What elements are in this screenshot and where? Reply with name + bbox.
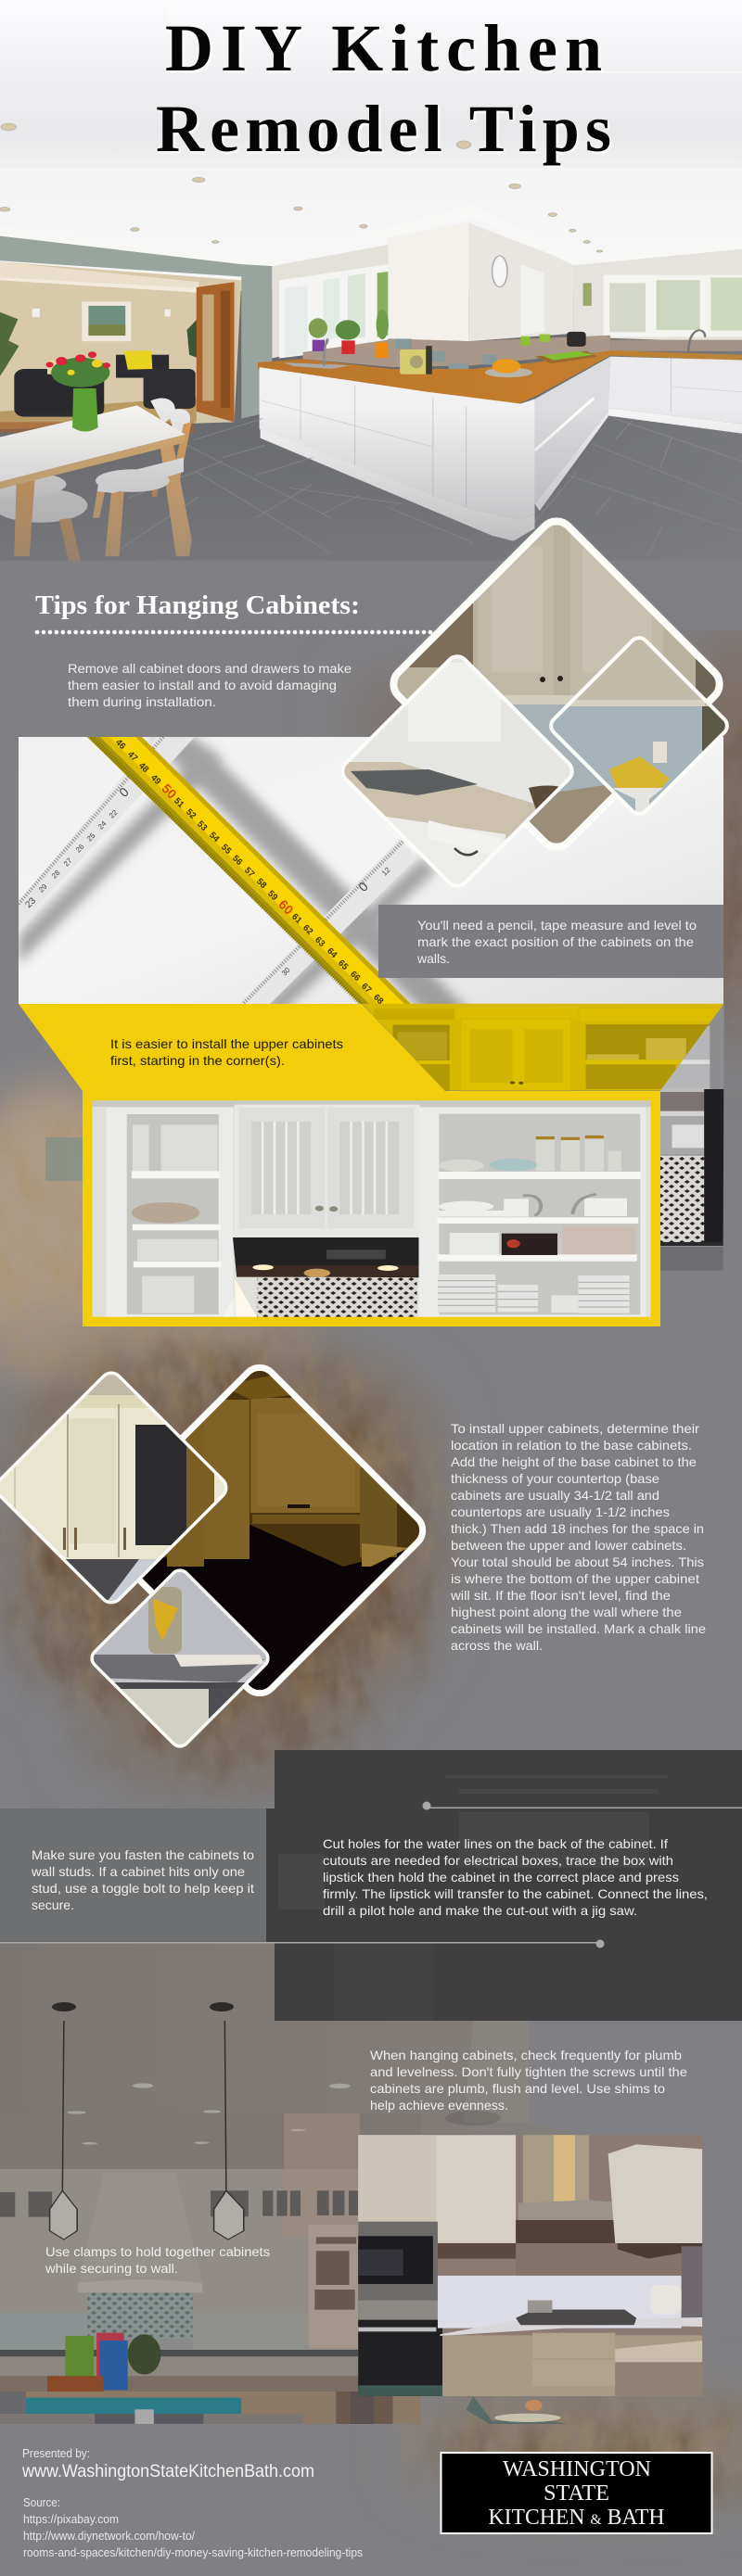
white folding ruler upper: 24 — [96, 819, 109, 831]
connector line bottom — [0, 1939, 605, 1948]
logo: KITCHEN & BATH — [488, 2506, 664, 2530]
sink and tap — [284, 330, 705, 369]
clock and shutters — [493, 256, 544, 336]
range hood — [78, 2172, 202, 2283]
rust texture background — [0, 621, 742, 2494]
tape numbers: 58 — [254, 877, 268, 891]
range hood — [233, 1237, 419, 1277]
white folding ruler upper: 26 — [74, 843, 86, 855]
footer: presented by — [21, 2447, 314, 2481]
text box: pencil tape measure: walls. — [416, 951, 450, 966]
text: remove doors — [68, 661, 352, 709]
text: cut holes — [323, 1836, 708, 1918]
tape numbers: 46 — [113, 738, 127, 752]
title: DIY Kitchen — [165, 11, 602, 85]
tape numbers: 60 — [275, 896, 297, 918]
footer: presented by: www.WashingtonStateKitchenBath.com — [21, 2461, 314, 2481]
mosaic backsplash — [257, 1277, 416, 1317]
footer: sources — [23, 2496, 363, 2559]
slate floor tile lines — [113, 419, 742, 556]
white folding ruler upper — [19, 737, 195, 927]
tape numbers: 49 — [148, 773, 162, 787]
tape numbers — [113, 738, 385, 1007]
text: install upper cabinets: highest point along the wall where the — [451, 1605, 682, 1619]
tape numbers: 63 — [313, 935, 326, 949]
text: cut holes: drill a pilot hole and make the cut-out with a jig saw. — [323, 1903, 637, 1918]
white folding ruler upper: 29 — [37, 882, 49, 895]
white folding ruler lower: 12 — [380, 866, 392, 878]
tape numbers: 68 — [371, 993, 385, 1007]
grey cabinet photo behind — [660, 1004, 724, 1271]
footer: sources: https://pixabay.com — [23, 2513, 119, 2526]
text: use clamps: while securing to wall. — [45, 2261, 178, 2276]
tape numbers: 61 — [289, 912, 304, 926]
yellow tinted cabinets — [360, 1004, 726, 1093]
text: remove doors: them easier to install and to avoid damaging — [68, 678, 337, 692]
white folding ruler upper: 23 — [23, 895, 38, 910]
dining table with chairs — [0, 398, 192, 561]
panel: grey side panel — [0, 1808, 275, 1943]
tile backsplash — [303, 336, 742, 375]
tape numbers: 55 — [219, 843, 234, 857]
fruit bowl — [485, 359, 532, 377]
wooden countertop — [258, 350, 742, 404]
pendant lamps — [50, 2021, 244, 2240]
window row — [0, 2190, 358, 2217]
recessed ceiling lights — [0, 123, 602, 252]
plant pots on sill — [309, 310, 550, 358]
text: remove doors: them during installation. — [68, 694, 216, 709]
text: install upper cabinets: cabinets will be installed. Mark a chalk line — [451, 1621, 706, 1636]
footer: presented by: Presented by: — [22, 2447, 90, 2460]
white folding ruler upper: 28 — [50, 869, 62, 881]
yellow radio — [400, 346, 432, 374]
chopping board — [535, 351, 597, 363]
text: use clamps: Use clamps to hold together cabinets — [45, 2244, 270, 2259]
text: install upper cabinets: location in relation to the base cabinets. — [451, 1438, 692, 1453]
tape numbers: 62 — [301, 923, 314, 937]
text: install upper cabinets: between the upper and lower cabinets. — [451, 1538, 686, 1553]
fade from photo to background — [0, 408, 742, 630]
back wall and windows — [272, 245, 390, 359]
ceiling — [0, 0, 742, 291]
diamond photo: large cabinets — [385, 514, 728, 854]
tape numbers: 64 — [325, 946, 339, 960]
text: plumb and level: cabinets are plumb, flush and level. Use shims to — [370, 2081, 665, 2096]
text: install upper cabinets: across the wall. — [451, 1638, 543, 1653]
text: install upper cabinets: Your total should be about 54 inches. This — [451, 1554, 704, 1569]
white folding ruler upper: 27 — [62, 857, 74, 869]
mosaic tile — [87, 2292, 193, 2339]
text: fasten to studs: Make sure you fasten the cabinets to — [32, 1847, 254, 1862]
text: cut holes: Cut holes for the water lines on the back of the cabinet. If — [323, 1836, 668, 1851]
lamp fittings — [52, 2002, 234, 2011]
text: install upper cabinets: thickness of your countertop (base — [451, 1471, 659, 1486]
living room — [0, 261, 241, 433]
text: install upper cabinets: countertops are usually 1-1/2 inches — [451, 1504, 670, 1519]
diamond photo: cream cabinets — [0, 1367, 232, 1615]
tape numbers: 56 — [230, 854, 244, 868]
text: fasten to studs: stud, use a toggle bolt to help keep it — [32, 1881, 254, 1896]
text: plumb and level: help achieve evenness. — [370, 2098, 508, 2113]
photo: modern kitchen — [358, 2135, 702, 2396]
footer: sources: rooms-and-spaces/kitchen/diy-money-saving-kitchen-remodeling-tips — [23, 2546, 363, 2559]
panel: dark cut holes panel — [0, 1750, 742, 2021]
text box: pencil tape measure: You'll need a pencil, tape measure and level to — [417, 918, 697, 933]
title — [156, 11, 611, 166]
tape numbers: 51 — [172, 796, 186, 810]
tape numbers: 48 — [136, 761, 150, 775]
wall art — [583, 283, 592, 306]
white folding ruler upper: 22 — [108, 808, 120, 820]
title rule lines — [0, 0, 742, 170]
tape numbers: 47 — [125, 750, 139, 764]
logo: STATE — [544, 2481, 609, 2506]
yellow trapezoid — [19, 1004, 660, 1326]
text: upper cabinets first: It is easier to install the upper cabinets — [110, 1036, 343, 1051]
diamond photo: vase on counter — [88, 1567, 274, 1754]
chair and plate at photo base — [467, 2396, 568, 2424]
white folding ruler lower: 0 — [355, 879, 371, 895]
crown moulding — [0, 205, 742, 266]
text: install upper cabinets: To install upper cabinets, determine their — [451, 1421, 699, 1436]
heading: tips for hanging cabinets: Tips for Hanging Cabinets: — [35, 590, 360, 620]
kettle — [567, 332, 586, 347]
diamond photo: small bananas — [547, 634, 733, 820]
panel: upper cabinets callout — [19, 1004, 726, 1326]
tape numbers: 57 — [242, 866, 256, 880]
text: install upper cabinets: Add the height of the base cabinet to the — [451, 1454, 697, 1469]
text: plumb and level: and levelness. Don't fully tighten the screws until the — [370, 2064, 687, 2079]
hero kitchen photo — [0, 0, 742, 561]
flower vase — [45, 351, 110, 432]
text: remove doors: Remove all cabinet doors and drawers to make — [68, 661, 352, 676]
text: upper cabinets first: first, starting in the corner(s). — [110, 1053, 285, 1068]
panel: measuring tape — [19, 737, 723, 1015]
text: use clamps — [45, 2244, 270, 2276]
right windows — [604, 275, 742, 337]
text: install upper cabinets: thick.) Then add 18 inches for the space in — [451, 1521, 704, 1536]
text: fasten to studs — [31, 1847, 254, 1912]
text: install upper cabinets: is where the bottom of the upper cabinet — [451, 1571, 699, 1586]
white folding ruler upper: 0 — [116, 784, 132, 800]
tape numbers: 66 — [348, 970, 362, 983]
white folding ruler lower: 30 — [280, 966, 292, 978]
tape numbers: 53 — [195, 819, 209, 833]
yellow tape — [87, 737, 411, 1007]
tape numbers: 54 — [207, 831, 222, 844]
footer: sources: Source: — [23, 2496, 60, 2509]
wooden door — [197, 282, 235, 422]
ruler shadows — [19, 737, 473, 1015]
tape numbers: 52 — [184, 807, 198, 821]
text: plumb and level — [370, 2048, 687, 2113]
tape numbers: 67 — [359, 982, 373, 996]
cabinets and counter — [0, 2313, 87, 2350]
logo — [441, 2453, 712, 2533]
white folding ruler lower — [239, 839, 417, 1004]
text: plumb and level: When hanging cabinets, check frequently for plumb — [370, 2048, 682, 2062]
diamond photo: dark wood cabinets — [137, 1364, 427, 1696]
text: cut holes: cutouts are needed for electrical boxes, trace the box with — [323, 1853, 673, 1868]
text: cut holes: firmly. The lipstick will transfer to the cabinet. Connect the lines, — [323, 1886, 708, 1901]
text: install upper cabinets — [450, 1421, 706, 1653]
left grey wall — [0, 235, 272, 419]
tape numbers: 65 — [336, 958, 351, 972]
text: install upper cabinets: will sit. If the floor isn't level, find the — [450, 1588, 671, 1603]
tape numbers: 59 — [265, 889, 279, 903]
shelves — [309, 2225, 358, 2348]
white folding ruler upper: 25 — [85, 831, 97, 844]
cereal boxes — [47, 2333, 160, 2392]
ceiling spots — [67, 2083, 351, 2145]
connector line top — [423, 1802, 742, 1809]
text box: pencil tape measure — [378, 905, 723, 978]
text: fasten to studs: secure. — [32, 1897, 74, 1912]
diamond photo: cooktop — [341, 654, 574, 888]
title: Remodel Tips — [156, 92, 611, 166]
lower kitchen background photo — [0, 1943, 742, 2424]
text box: pencil tape measure: mark the exact position of the cabinets on the — [417, 934, 694, 949]
logo: WASHINGTON — [503, 2457, 651, 2481]
footer: sources: http://www.diynetwork.com/how-to/ — [23, 2530, 196, 2543]
kitchen column — [388, 222, 468, 341]
photo: white cabinets with shelves — [92, 1100, 651, 1317]
text: fasten to studs: wall studs. If a cabinet hits only one — [31, 1864, 245, 1879]
tape numbers: 50 — [159, 780, 180, 802]
text: upper cabinets first — [110, 1036, 343, 1068]
text: cut holes: lipstick then hold the cabinet in the correct place and press — [323, 1870, 679, 1884]
white cabinets — [260, 357, 742, 541]
text: install upper cabinets: cabinets are usually 34-1/2 tall and — [451, 1488, 659, 1503]
